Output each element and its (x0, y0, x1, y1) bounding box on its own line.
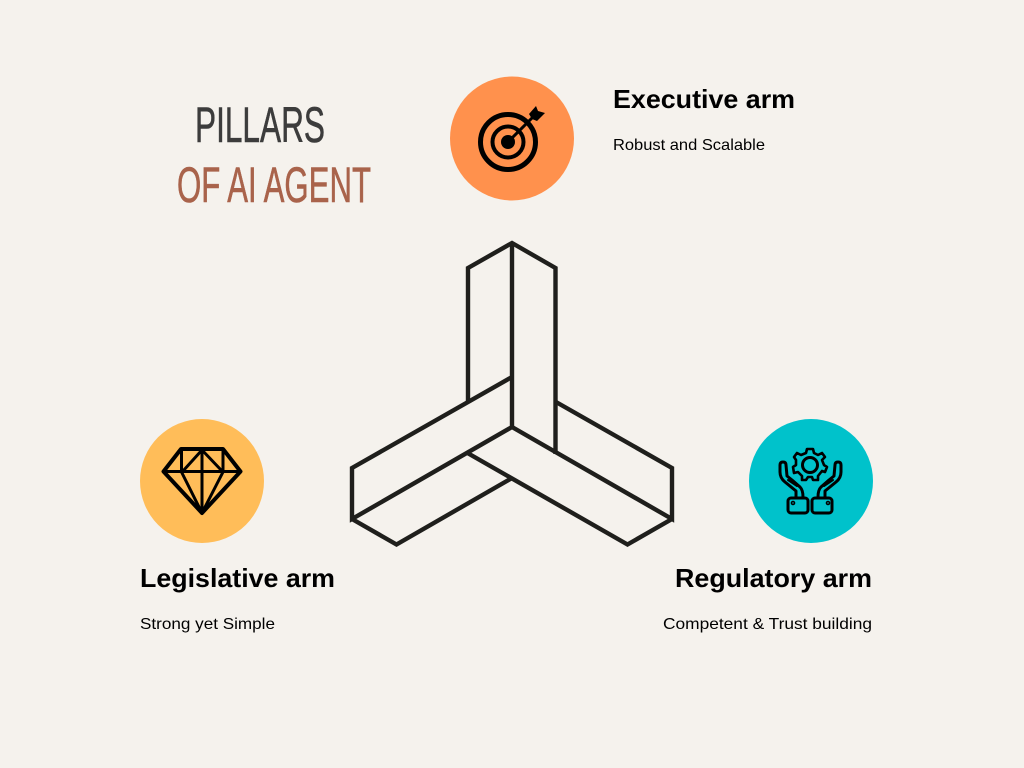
legislative arm: icon (140, 419, 264, 543)
title (177, 97, 371, 213)
icon: diamond (164, 449, 240, 513)
regulatory arm: text: Competent & Trust building (663, 616, 872, 633)
icon: hands holding gear (780, 449, 841, 513)
regulatory arm: text: Regulatory arm (675, 563, 872, 593)
legislative arm: text: Legislative arm (140, 563, 335, 593)
executive arm: text: Executive arm (613, 84, 795, 114)
title: OF AI AGENT (177, 157, 371, 213)
executive arm: text (613, 84, 795, 154)
legislative arm: text (140, 563, 335, 633)
regulatory arm: icon (749, 419, 873, 543)
executive arm: text: Robust and Scalable (613, 137, 765, 154)
central three-armed pillar diagram (352, 243, 672, 544)
legislative arm: text: Strong yet Simple (140, 616, 275, 633)
executive arm: icon (450, 76, 574, 200)
icon: target with arrow (480, 106, 545, 170)
title: PILLARS (195, 97, 325, 153)
regulatory arm: text (663, 563, 872, 633)
